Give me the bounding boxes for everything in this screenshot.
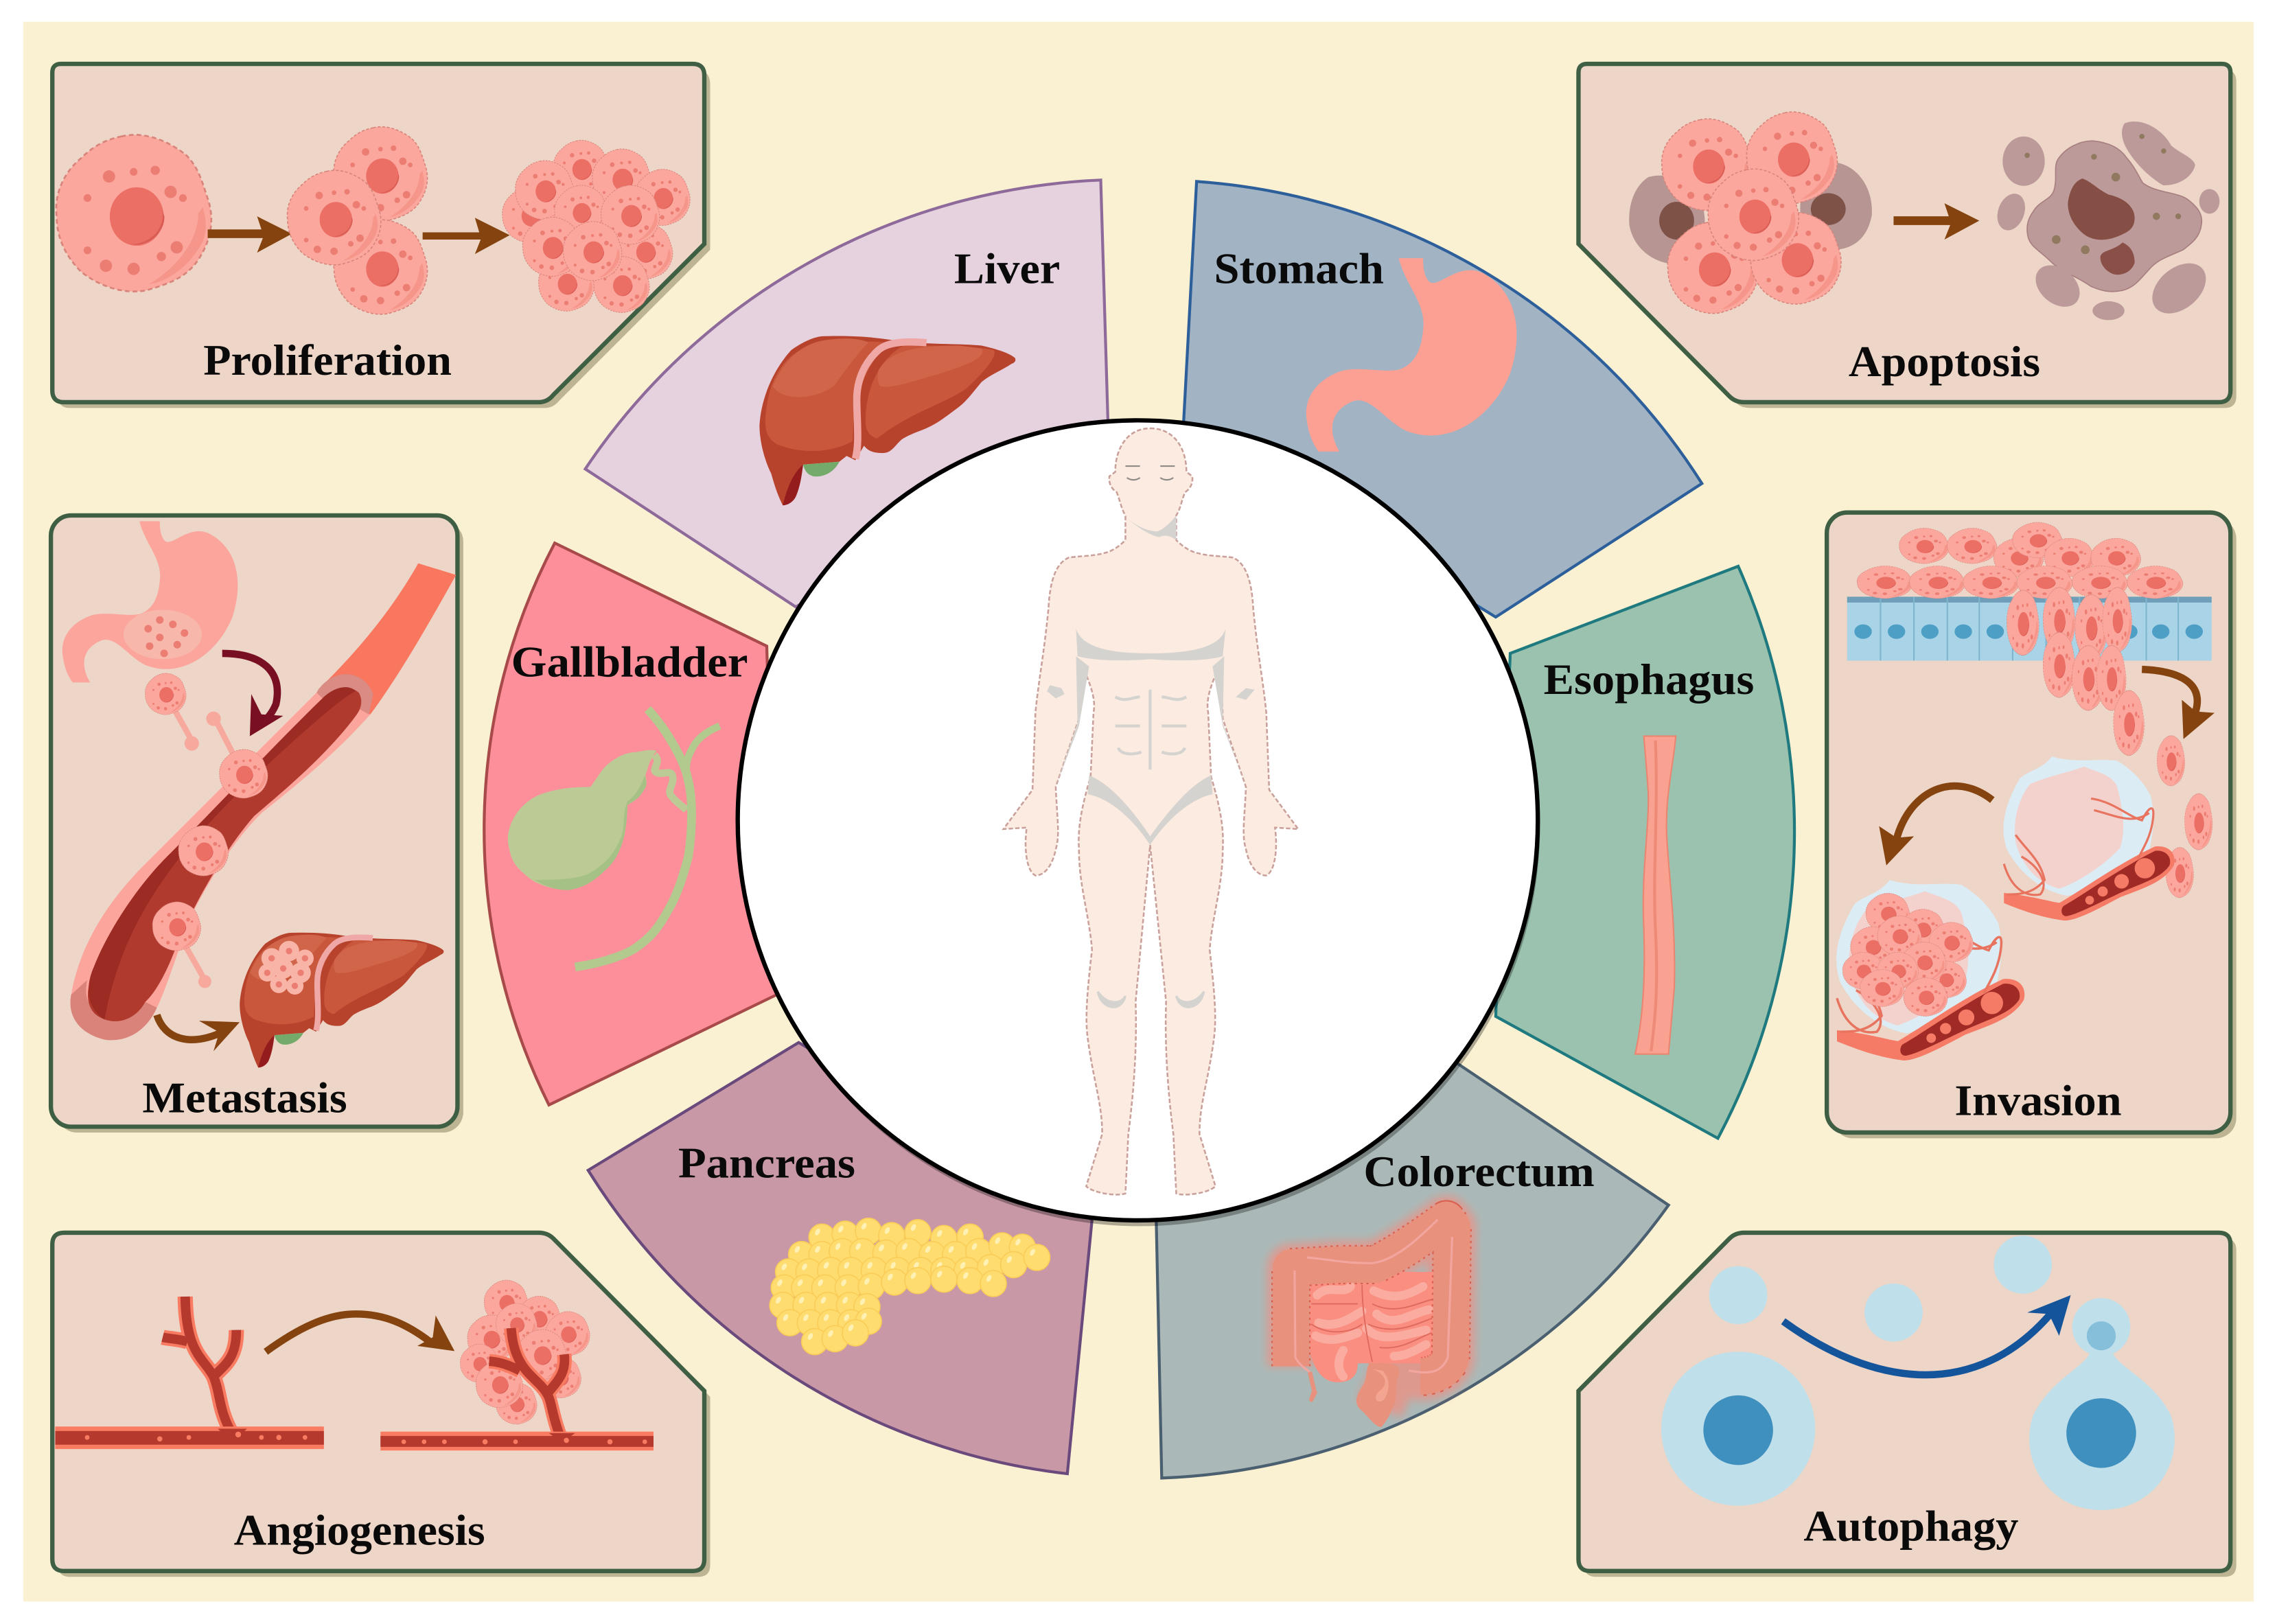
rectum bbox=[1356, 1362, 1399, 1427]
icon: tumour cells in vessel bbox=[152, 712, 268, 988]
label: Gallbladder: Gallbladder bbox=[511, 638, 748, 686]
segment: Esophagus bbox=[1496, 566, 1794, 1138]
icon: cell cluster bbox=[502, 140, 690, 312]
icon: dying cells behind bbox=[1629, 163, 1872, 264]
icon: left cell bbox=[1661, 1352, 1815, 1506]
icon: stomach with tumour bbox=[62, 521, 238, 682]
label: Liver: Liver bbox=[954, 244, 1060, 292]
label: Autophagy: Autophagy bbox=[1803, 1501, 2019, 1550]
label: Colorectum: Colorectum bbox=[1363, 1147, 1595, 1196]
arrow: invasion down bbox=[2142, 669, 2215, 739]
icon: parent vessel with sprout bbox=[55, 1297, 324, 1449]
icon: gallbladder bbox=[508, 709, 719, 967]
segment: Colorectum bbox=[1156, 1060, 1669, 1478]
icon: right cell with budding vesicle bbox=[2029, 1298, 2175, 1510]
arrow: invasion to second tissue bbox=[1879, 786, 1992, 866]
icon: blood vessel bbox=[71, 564, 456, 1040]
panel: Apoptosis bbox=[1578, 64, 2236, 408]
icon: detaching tumour cell bbox=[145, 673, 199, 751]
label: Apoptosis: Apoptosis bbox=[1849, 337, 2040, 386]
label: Proliferation: Proliferation bbox=[203, 336, 452, 384]
icon: invading tumour cells bbox=[2007, 588, 2212, 898]
panel: Autophagy bbox=[1578, 1233, 2236, 1577]
icon: stomach bbox=[1306, 258, 1516, 452]
segment: Gallbladder bbox=[484, 543, 777, 1105]
icon: liver bbox=[759, 336, 1015, 505]
icon: colorectum bbox=[1291, 1220, 1452, 1427]
centre circle with body bbox=[738, 420, 1540, 1226]
arrow: second proliferation bbox=[423, 218, 510, 254]
icon: liver with metastasis bbox=[240, 933, 443, 1067]
panel: Proliferation bbox=[52, 64, 710, 408]
icon: colonised tissue bbox=[1836, 880, 2024, 1060]
segment: Stomach bbox=[1183, 181, 1702, 617]
label: Pancreas: Pancreas bbox=[678, 1139, 855, 1187]
arrow: autophagy bbox=[1783, 1295, 2071, 1375]
label: Angiogenesis: Angiogenesis bbox=[234, 1506, 485, 1555]
icon: floating vesicles bbox=[1709, 1236, 2052, 1342]
segment: Liver bbox=[586, 180, 1108, 607]
panel: Angiogenesis bbox=[52, 1233, 710, 1577]
icon: epithelium layer bbox=[1847, 596, 2212, 660]
arrow: stomach to vessel bbox=[222, 653, 284, 736]
small intestine bbox=[1310, 1272, 1433, 1382]
icon: esophagus bbox=[1635, 736, 1676, 1054]
panel: Metastasis bbox=[51, 515, 463, 1133]
icon: apoptotic cell and fragments bbox=[1993, 121, 2219, 323]
arrow: angiogenesis bbox=[266, 1314, 454, 1352]
label: Stomach: Stomach bbox=[1214, 244, 1384, 292]
segment: Pancreas bbox=[588, 1043, 1092, 1474]
icon: flattened tumour cells bbox=[1857, 522, 2183, 599]
panel: Invasion bbox=[1827, 513, 2236, 1138]
icon: living tumour cells bbox=[1662, 112, 1841, 314]
large intestine bbox=[1291, 1220, 1452, 1400]
label: Metastasis: Metastasis bbox=[142, 1073, 347, 1122]
icon: human body bbox=[1004, 428, 1298, 1194]
icon: tumour with new vessels bbox=[380, 1280, 654, 1450]
arrow: to apoptosis bbox=[1893, 203, 1979, 240]
label: Invasion: Invasion bbox=[1954, 1076, 2122, 1125]
icon: tissue with vessel bbox=[2004, 756, 2175, 920]
icon: three dividing cells bbox=[287, 127, 428, 314]
icon: single cancer cell bbox=[56, 135, 211, 292]
icon: pancreas bbox=[770, 1218, 1050, 1355]
label: Esophagus: Esophagus bbox=[1544, 655, 1754, 704]
arrow: first proliferation bbox=[208, 216, 292, 253]
arrow: vessel to liver bbox=[157, 1015, 240, 1052]
